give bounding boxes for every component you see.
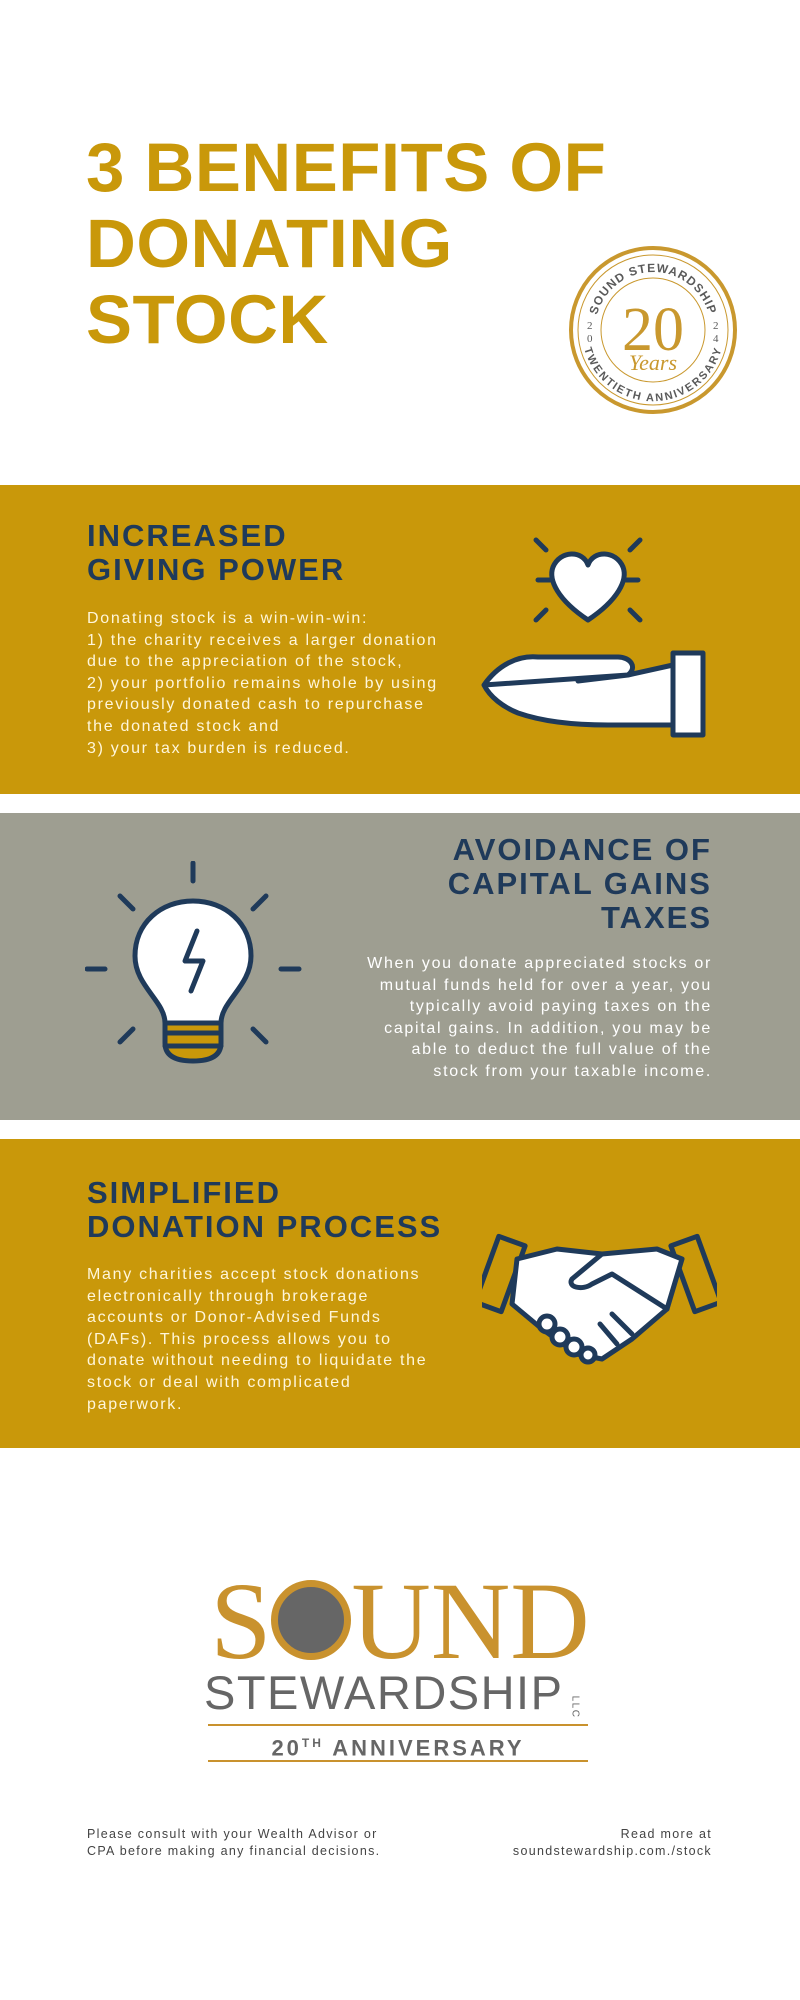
- footer link: [513, 1827, 712, 1858]
- logo word: SOUND: S UND: [210, 1560, 590, 1682]
- body text: Donating stock is a win-win-win:: [87, 610, 368, 627]
- heading: SIMPLIFIED: [87, 1175, 281, 1210]
- badge: 20 years: 20: [622, 296, 684, 364]
- body text: stock or deal with complicated: [87, 1374, 351, 1391]
- body text: [87, 1266, 427, 1413]
- icon: heart in hand: [482, 538, 706, 738]
- body text: previously donated cash to repurchase: [87, 696, 425, 713]
- heading: TAXES: [601, 900, 712, 935]
- footer link: soundstewardship.com./stock: [513, 1844, 712, 1858]
- body text: donate without needing to liquidate the: [87, 1352, 427, 1369]
- footer disclaimer: [87, 1827, 380, 1858]
- body text: 3) your tax burden is reduced.: [87, 740, 351, 757]
- heading: [87, 518, 345, 587]
- panel: increased giving power: [0, 485, 800, 794]
- body text: due to the appreciation of the stock,: [87, 653, 403, 670]
- body text: (DAFs). This process allows you to: [87, 1331, 392, 1348]
- body text: Many charities accept stock donations: [87, 1266, 420, 1283]
- body text: 2) your portfolio remains whole by using: [87, 675, 438, 692]
- body text: the donated stock and: [87, 718, 280, 735]
- body text: typically avoid paying taxes on the: [410, 998, 712, 1015]
- logo word: STEWARDSHIP: STEWARDSHIP: [204, 1666, 563, 1719]
- body text: paperwork.: [87, 1396, 183, 1413]
- heading: [448, 832, 712, 935]
- body text: accounts or Donor-Advised Funds: [87, 1309, 382, 1326]
- title: [86, 129, 606, 358]
- logo: 20th anniversary: 20TH ANNIVERSARY: [271, 1735, 525, 1760]
- body text: When you donate appreciated stocks or: [367, 955, 712, 972]
- body text: mutual funds held for over a year, you: [380, 977, 712, 994]
- badge: 20 years: TWENTIETH ANNIVERSARY: [585, 346, 720, 402]
- badge: 20 years: 2: [713, 320, 718, 332]
- icon: handshake: [482, 1234, 717, 1364]
- body text: [87, 610, 438, 757]
- badge: 20 years: SOUND STEWARDSHIP: [590, 264, 716, 314]
- heading: [87, 1175, 442, 1244]
- body text: 1) the charity receives a larger donation: [87, 632, 438, 649]
- logo word: STEWARDSHIP: LLC: [570, 1696, 581, 1718]
- panel: simplified donation process: [0, 1139, 800, 1448]
- footer disclaimer: Please consult with your Wealth Advisor or: [87, 1827, 378, 1841]
- heading: DONATION PROCESS: [87, 1209, 442, 1244]
- body text: electronically through brokerage: [87, 1288, 369, 1305]
- badge: 20 years: 2: [587, 320, 592, 332]
- heading: GIVING POWER: [87, 552, 345, 587]
- heading: AVOIDANCE OF: [453, 832, 712, 867]
- body text: capital gains. In addition, you may be: [384, 1020, 712, 1037]
- title: STOCK: [86, 281, 329, 358]
- title: 3 BENEFITS OF: [86, 129, 606, 206]
- heading: INCREASED: [87, 518, 288, 553]
- footer disclaimer: CPA before making any financial decisions.: [87, 1844, 380, 1858]
- badge: 20 years: 4: [713, 333, 719, 345]
- body text: stock from your taxable income.: [433, 1063, 712, 1080]
- footer link: Read more at: [621, 1827, 712, 1841]
- body text: able to deduct the full value of the: [412, 1041, 712, 1058]
- body text: [367, 955, 712, 1080]
- badge: 20 years: [569, 246, 737, 414]
- logo: 20th anniversary: [208, 1724, 588, 1762]
- title: DONATING: [86, 205, 453, 282]
- badge: 20 years: 0: [587, 333, 593, 345]
- heading: CAPITAL GAINS: [448, 866, 712, 901]
- icon: light bulb: [85, 861, 302, 1064]
- badge: 20 years: Years: [629, 350, 677, 375]
- logo: sound stewardship: [204, 1560, 590, 1762]
- panel: avoidance of capital gains taxes: [0, 813, 800, 1120]
